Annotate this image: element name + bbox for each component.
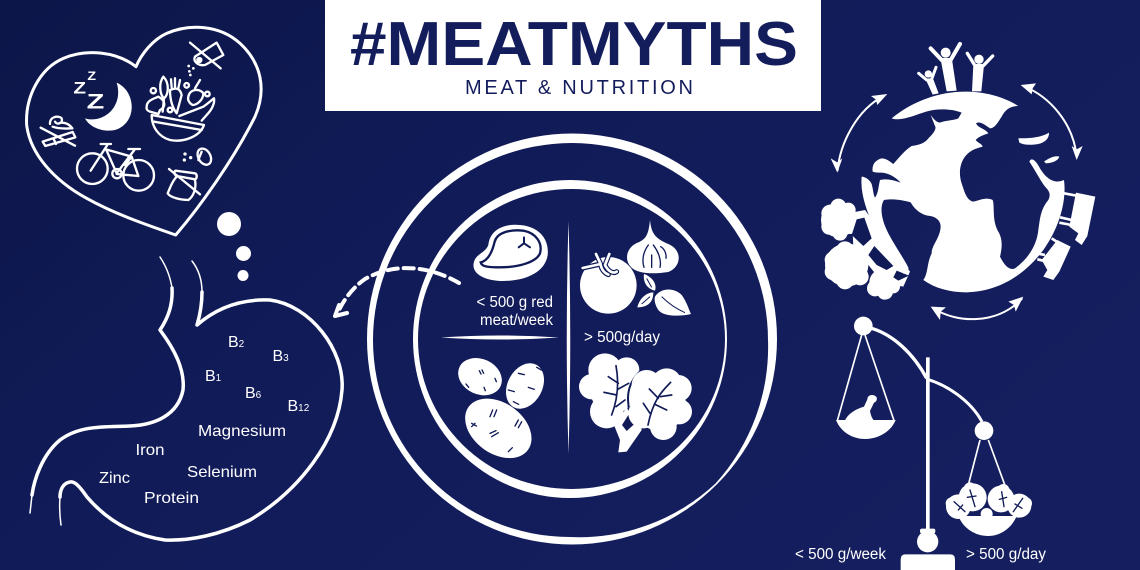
scale labels — [795, 546, 1046, 563]
meat pan — [836, 335, 896, 439]
thought bubble dots — [217, 212, 251, 281]
nutrients in stomach — [99, 334, 310, 507]
icon: spinach — [579, 353, 692, 452]
icon: steak — [473, 225, 548, 281]
plate labels: > 500g/day — [584, 329, 660, 346]
scale beam and stand — [854, 317, 993, 570]
balance scale — [836, 317, 1032, 570]
nutrients in stomach: Selenium — [187, 464, 257, 481]
icon: no sugary drink jar — [168, 146, 214, 200]
arrows around globe — [838, 86, 1077, 319]
nutrients in stomach: B1 — [205, 368, 222, 385]
title: #MEATMYTHS — [350, 10, 798, 79]
nutrients in stomach: Iron — [136, 442, 164, 459]
nutrients in stomach: Protein — [144, 490, 199, 507]
scale labels: < 500 g/week — [795, 546, 886, 563]
plate labels: < 500 g red — [476, 294, 553, 311]
stomach outline — [30, 257, 342, 540]
icon: cows — [1037, 193, 1095, 280]
nutrients in stomach: B12 — [288, 398, 310, 415]
plate labels: meat/week — [480, 312, 553, 329]
dashed arrow from meat to stomach — [335, 268, 459, 316]
heart outline — [27, 27, 261, 235]
plate food — [452, 220, 692, 470]
heart thought bubble — [27, 27, 261, 235]
subtitle: MEAT & NUTRITION — [465, 77, 693, 99]
title banner — [325, 0, 821, 111]
outer plate ring — [367, 134, 777, 545]
icon: salad bowl — [146, 77, 214, 141]
icon: moon and zzz: Z — [73, 78, 86, 97]
vegetable pan — [946, 440, 1032, 536]
icon: tomato — [580, 254, 637, 314]
icon: potatoes — [452, 351, 552, 470]
plate dividers — [441, 221, 570, 454]
nutrients in stomach: B2 — [228, 334, 245, 351]
nutrients in stomach: Zinc — [99, 470, 130, 487]
icon: basil — [637, 274, 691, 316]
icon: moon and zzz — [73, 69, 132, 131]
icon: people on globe — [919, 44, 993, 95]
plate labels — [476, 294, 660, 346]
icon: trees — [821, 199, 910, 300]
icon: moon and zzz: Z — [87, 69, 96, 83]
icon: garlic — [627, 220, 679, 273]
inner plate ring — [413, 180, 727, 498]
globe with people trees and cows — [821, 44, 1095, 320]
icon: bicycle — [77, 144, 154, 191]
icon: moon and zzz: Z — [87, 88, 104, 113]
nutrients in stomach: B3 — [272, 348, 289, 365]
plate — [367, 134, 777, 545]
nutrients in stomach: Magnesium — [198, 423, 286, 440]
globe — [861, 92, 1065, 292]
nutrients in stomach: B6 — [245, 385, 262, 402]
icon: no smoking — [41, 117, 75, 146]
icon: no salt — [189, 43, 223, 75]
scale labels: > 500 g/day — [966, 546, 1046, 563]
